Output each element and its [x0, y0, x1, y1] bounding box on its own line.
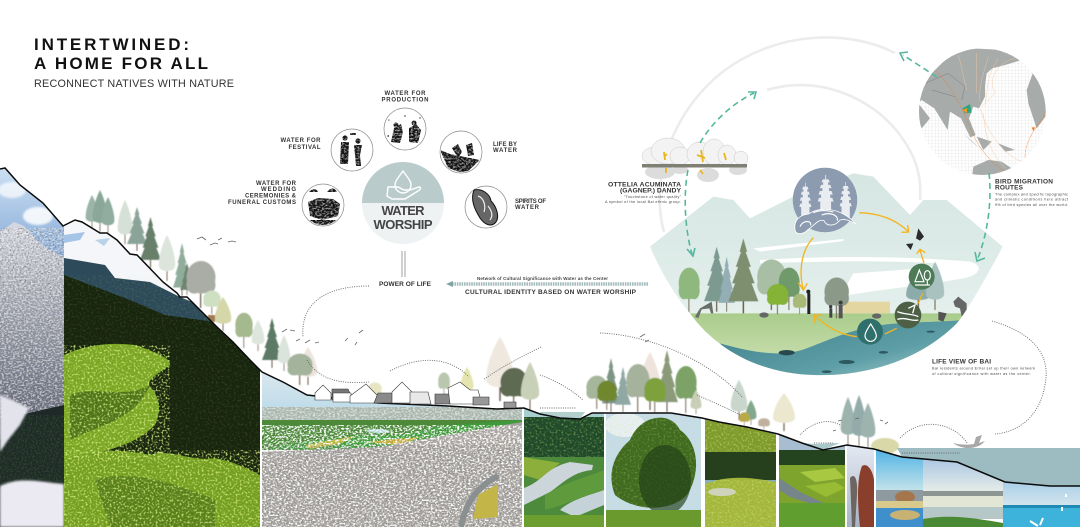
label: bird migration routes: and climatic conditions here attract [995, 198, 1068, 202]
circle: water for production [382, 91, 428, 150]
circle: water for festival: WATER FOR [280, 138, 321, 144]
dotted connection arcs [303, 286, 1046, 453]
title [34, 35, 208, 73]
circle: life by water: WATER [493, 148, 518, 154]
label: life view of Bai: Bai residents around Erhai set up their own network [932, 366, 1035, 370]
circle: water for production: WATER FOR [384, 91, 426, 97]
birds in flight [906, 228, 924, 250]
village houses [315, 382, 516, 408]
photo: red tree [847, 440, 876, 527]
icon: water drop on hand [387, 171, 421, 199]
photo strip below the terrain line [0, 165, 1080, 527]
circle: water for festival [280, 129, 373, 171]
water level bands [540, 412, 1080, 486]
bird migration globe [918, 48, 1047, 180]
photo: Bai town and fields [260, 360, 524, 527]
green dashed migration arrows [685, 52, 990, 261]
label: bird migration routes: BIRD MIGRATION [995, 178, 1053, 186]
cultural identity arrow: Network of Cultural Significance with Water as the Center [477, 276, 608, 281]
photo: forest hillside [64, 215, 262, 527]
flock of birds [197, 237, 888, 431]
central circle: water worship: WORSHIP [374, 217, 433, 232]
circle: water for wedding ceremonies and funeral customs: FUNERAL CUSTOMS [228, 200, 296, 206]
photo: big tree [605, 414, 701, 527]
cultural identity arrow [446, 276, 648, 296]
trees on the lakeshore [841, 395, 899, 454]
ottelia acuminata flower [642, 138, 748, 182]
inner orbit arc [767, 85, 920, 200]
circle: spirits of water: SPIRITS OF [515, 199, 546, 205]
mountain backdrop [650, 174, 1002, 314]
circle: water for wedding ceremonies and funeral customs: WEDDING [261, 187, 296, 193]
scene trees [679, 238, 944, 318]
label: Ottelia Acuminata: (GAGNEP.) DANDY [620, 188, 681, 194]
label: life view of Bai [932, 358, 1035, 376]
mist bands [753, 239, 979, 297]
circle: water for wedding ceremonies and funeral customs: CEREMONIES & [245, 194, 297, 200]
circle: water for festival: FESTIVAL [288, 145, 321, 151]
label: life view of Bai: of cultural significance with water as the center. [932, 372, 1031, 376]
circle: spirits of water [465, 186, 546, 228]
photo: meadow [705, 415, 779, 527]
flyway lines [958, 53, 1022, 168]
icon: water drop badge [857, 319, 883, 345]
label: Ottelia Acuminata: OTTELIA ACUMINATA [608, 182, 681, 188]
circle: water for production: PRODUCTION [382, 98, 428, 104]
photo: snow mountain [0, 165, 64, 527]
label: bird migration routes: 9% of bird species all over the world. [995, 203, 1068, 207]
label: bird migration routes: The complex and specific topographic [995, 192, 1068, 196]
photo: green pond [779, 430, 847, 527]
circle: spirits of water: WATER [515, 205, 540, 211]
trees on the wetland ridge [586, 350, 795, 431]
emblem: pagodas and waves [793, 168, 857, 234]
continents [918, 48, 1047, 180]
label: power of life: POWER OF LIFE [379, 281, 432, 288]
label: life view of Bai: LIFE VIEW OF BAI [932, 358, 991, 366]
outer orbit arc [660, 37, 895, 232]
title: INTERTWINED: [34, 35, 189, 54]
circle: water for wedding ceremonies and funeral customs [228, 181, 344, 226]
photo: misty lake [923, 455, 1003, 527]
label: Ottelia Acuminata: A symbol of the local Bai ethnic group. [605, 200, 681, 204]
circle: life by water [440, 131, 518, 174]
life view of Bai bowl scene [647, 168, 1007, 383]
photo: river wetland [524, 405, 606, 527]
trees over the village [368, 337, 539, 410]
water worship diagram [228, 91, 546, 244]
icon: forest badge [909, 264, 935, 290]
label: bird migration routes [995, 178, 1068, 207]
photo: blue lake with gulls [1003, 480, 1080, 527]
photo: lake and wetland birds [876, 445, 923, 527]
cultural identity arrow: CULTURAL IDENTITY BASED ON WATER WORSHIP [465, 289, 637, 296]
grass ground [680, 313, 967, 377]
boat silhouette [953, 435, 985, 448]
central circle: water worship: WATER [382, 203, 425, 218]
central circle: water worship [362, 162, 444, 244]
label: Ottelia Acuminata [605, 182, 682, 204]
label: bird migration routes: ROUTES [995, 184, 1024, 192]
icon: wetland badge [895, 302, 921, 328]
lake water [720, 320, 960, 376]
circle: life by water: LIFE BY [493, 142, 517, 148]
label: Ottelia Acuminata: "Touchstone of water quality" [624, 195, 682, 199]
title: A HOME FOR ALL [34, 54, 208, 73]
yellow cycle arrows [798, 213, 925, 337]
trees along the mountain slope [86, 190, 317, 385]
terrain section line [0, 168, 1080, 486]
crop field [843, 302, 890, 313]
circle: water for wedding ceremonies and funeral customs: WATER FOR [256, 181, 297, 187]
connector to power of life [402, 251, 405, 277]
subtitle: RECONNECT NATIVES WITH NATURE [34, 78, 234, 90]
animals and people [695, 290, 967, 373]
